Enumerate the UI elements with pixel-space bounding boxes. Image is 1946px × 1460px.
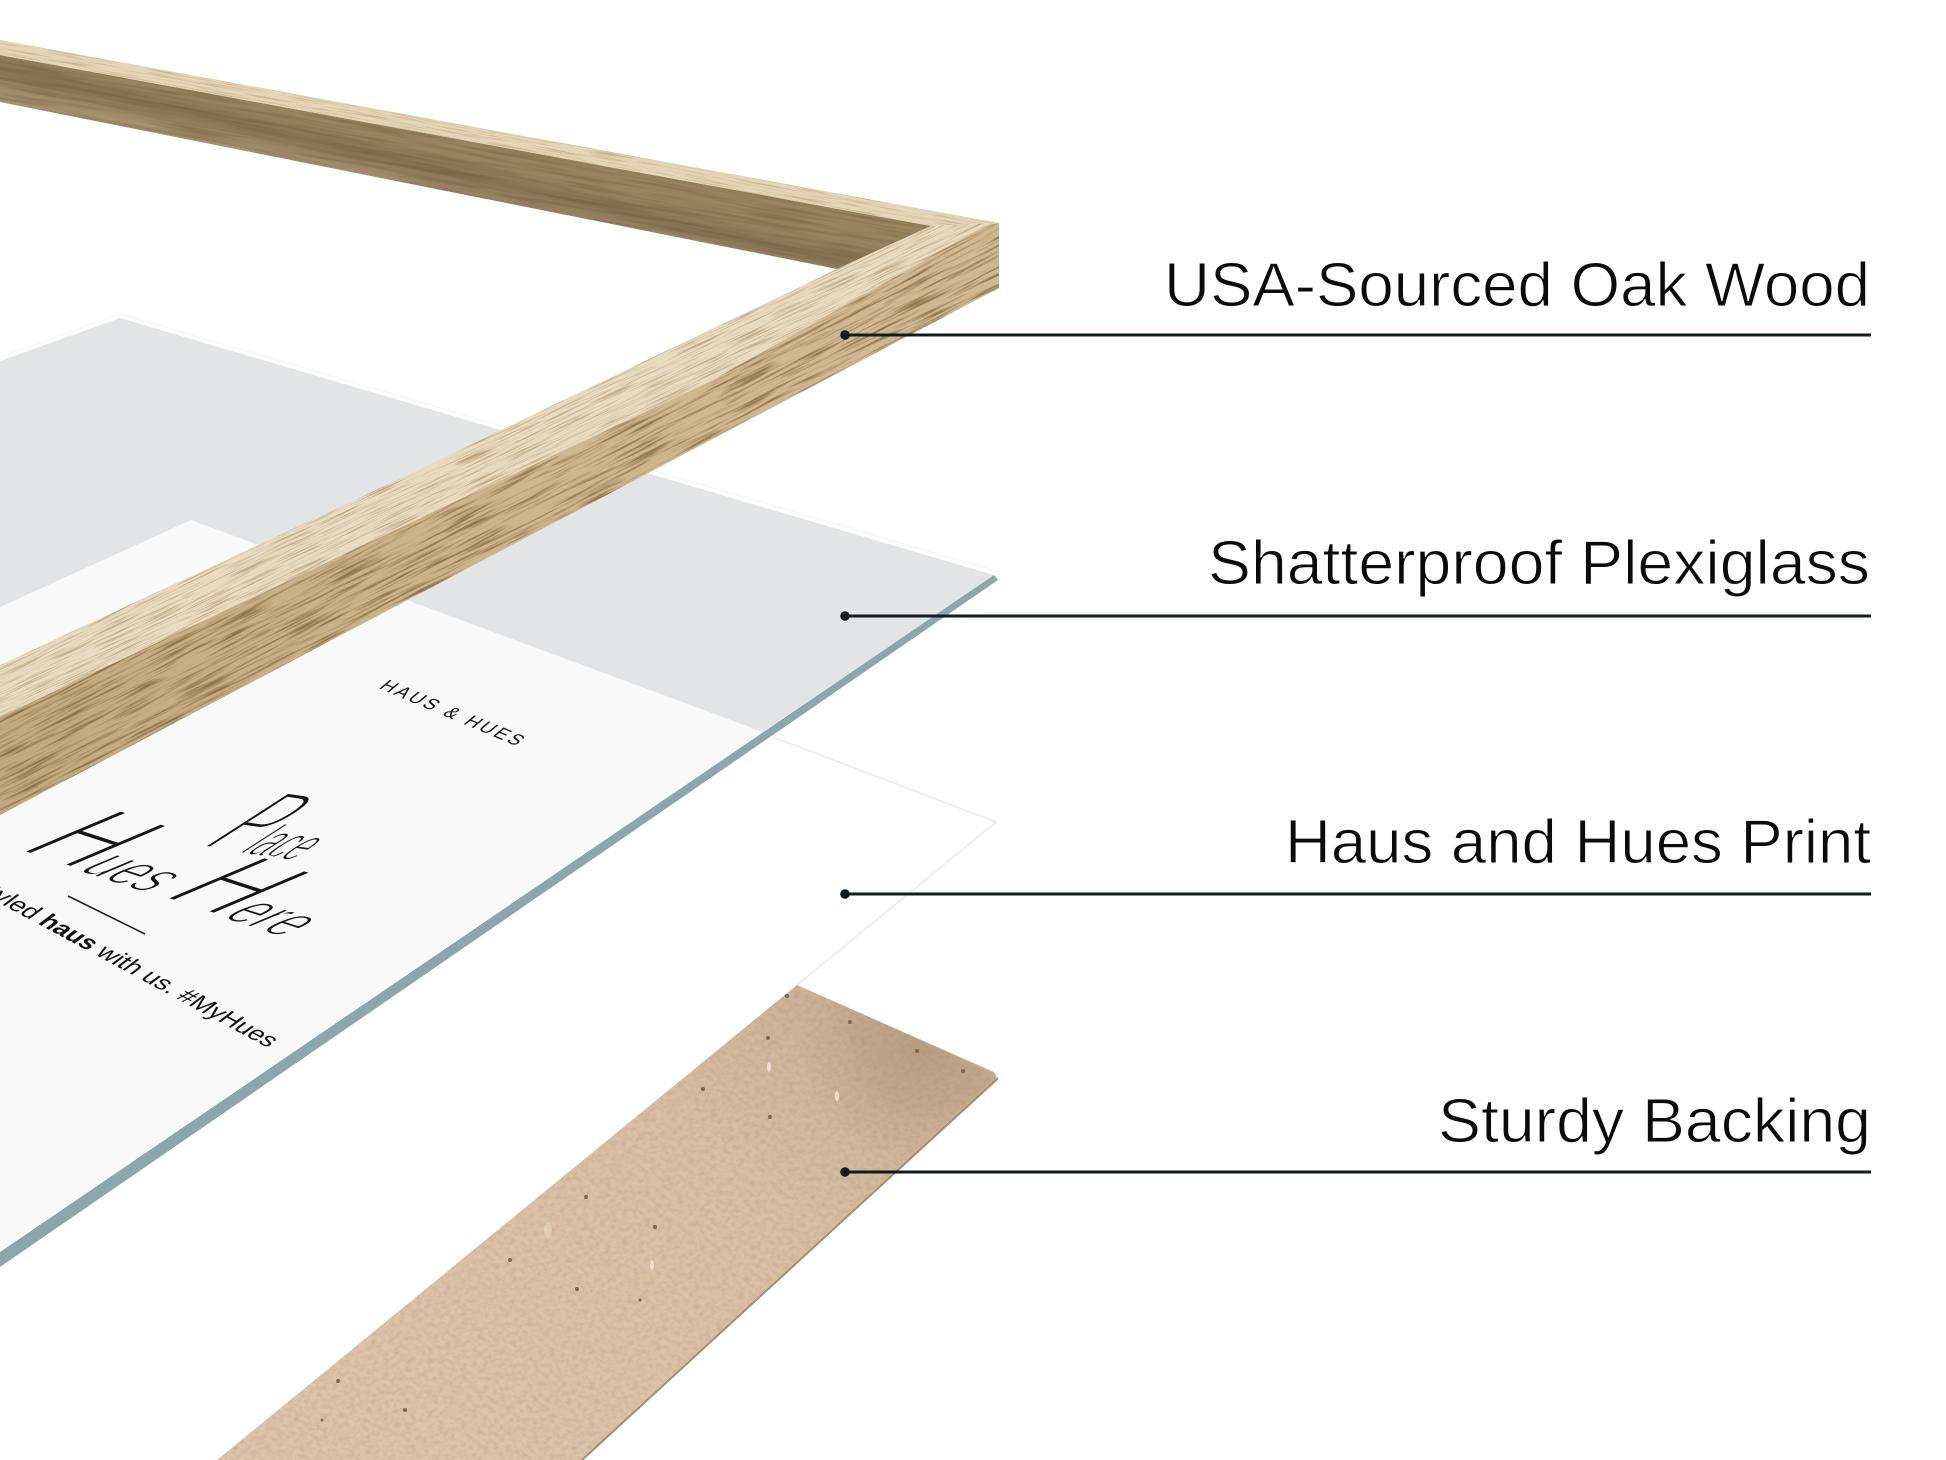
frame front rail top face (0, 223, 998, 717)
print sheet outline (773, 737, 996, 985)
callout: oak wood (840, 251, 1871, 340)
callout: oak wood: USA-Sourced Oak Wood (1164, 251, 1870, 320)
plexiglass sheet (0, 314, 998, 1267)
print seen through the glass (0, 520, 763, 1250)
callout: backing (840, 1087, 1871, 1177)
plexiglass teal edge (0, 575, 998, 1267)
oak wood frame (0, 40, 999, 815)
print brand name: HAUS & HUES (374, 677, 529, 749)
frame back rail top face (0, 40, 998, 226)
print script title: Place (170, 775, 406, 878)
callout: print (840, 808, 1871, 899)
callout: plexiglass (840, 529, 1871, 621)
backing board layer (200, 960, 1020, 1460)
frame inner recessed face (0, 55, 930, 269)
callout: print: Haus and Hues Print (1285, 808, 1871, 877)
callout: backing: Sturdy Backing (1438, 1087, 1871, 1156)
callout: plexiglass: Shatterproof Plexiglass (1208, 529, 1870, 598)
frame front rail side face (0, 223, 999, 815)
print divider (68, 896, 145, 934)
